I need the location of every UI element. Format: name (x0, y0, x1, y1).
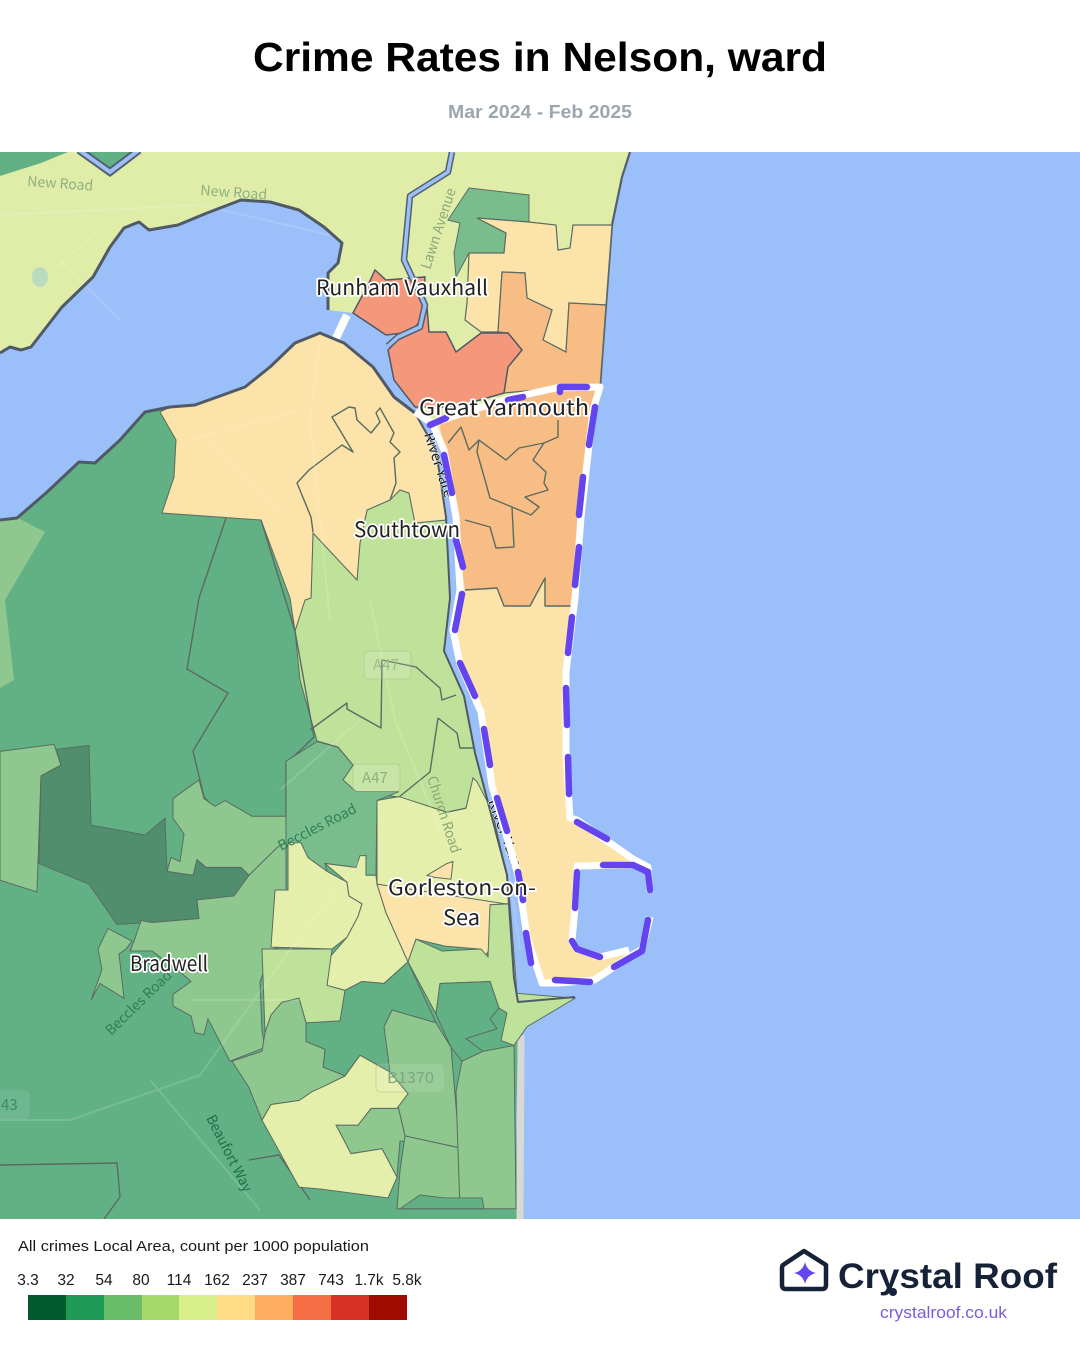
ward: green harbour (436, 982, 499, 1061)
road shield: A143: 43 (1, 1094, 18, 1115)
Southtown ward boundary (297, 407, 400, 532)
beach strip (520, 1035, 521, 1219)
faint street grid (0, 340, 540, 1210)
ward: yellow C (377, 778, 510, 904)
ward: mid north (167, 780, 286, 875)
road shield: B1370 (376, 1064, 444, 1092)
Breydon Water north shore (0, 200, 342, 353)
road label: Beccles Road north: Beccles Road (274, 799, 360, 855)
orange ward north (498, 272, 606, 393)
subtitle: date range: Mar 2024 - Feb 2025 (448, 101, 632, 122)
road label: Beaufort Way: Beaufort Way (202, 1111, 258, 1196)
left light ward (0, 518, 45, 688)
road shield: A47 south: A47 (362, 767, 388, 788)
road label: Beccles Road south: Beccles Road (101, 965, 176, 1040)
road shield: A47 south (353, 764, 400, 792)
panel: choropleth map (0, 150, 1080, 1219)
legend labels: 114 (167, 1272, 192, 1289)
legend labels: 387 (280, 1272, 306, 1289)
legend labels: 743 (318, 1272, 344, 1289)
ward: yellow A (271, 843, 362, 949)
place label: Runham Vauxhall: Runham Vauxhall (316, 272, 488, 302)
title: Crime Rates in Nelson, ward (253, 34, 827, 80)
place label: Gorleston-on-Sea: Sea (443, 902, 480, 932)
logo URL: crystalroof.co.uk (880, 1304, 1008, 1322)
icon: house with star (782, 1251, 826, 1289)
light green ward block east (295, 490, 490, 812)
road shield: A143 (0, 1091, 29, 1119)
road label: New Road west: New Road (27, 171, 94, 196)
road shield: A47 north: A47 (373, 654, 399, 675)
ward: Bradwell central (130, 843, 286, 1061)
ward: yellow south (262, 1055, 408, 1198)
ward: darkest green (39, 745, 249, 924)
bottom green patch (400, 1195, 484, 1209)
ward outline: white with purple dashes (415, 387, 650, 983)
ward: mid east (384, 1010, 459, 1148)
legend labels (17, 1272, 422, 1289)
place label: Southtown: Southtown (354, 514, 460, 544)
ward: beige Gorleston (377, 884, 505, 962)
road label: Lawn Avenue: Lawn Avenue (416, 185, 461, 272)
bridge (336, 315, 347, 338)
logo: Crystal Roof (782, 1251, 1057, 1322)
road shield: A47 north (364, 651, 411, 679)
ward: yellow B (325, 856, 408, 990)
place label: Gorleston-on-Sea: Gorleston-on- (388, 872, 536, 902)
ward: south light green (408, 904, 575, 1045)
river west bank and pier edge (415, 413, 575, 1002)
light green internal boundaries (310, 660, 473, 797)
north-east coast edge (600, 152, 630, 387)
ward: left light (0, 744, 61, 892)
ward: green centre (306, 962, 436, 1076)
legend labels: 80 (132, 1272, 150, 1289)
legend labels: 32 (57, 1272, 75, 1289)
salmon ward: town centre (388, 307, 522, 407)
internal boundaries in the west (0, 518, 314, 1219)
north river channel (388, 152, 452, 346)
road label: New Road east: New Road (200, 180, 268, 205)
Zone group: wards south (zoomed coordinates corrected) (0, 741, 575, 1209)
logo wordmark: Crystal Roof (838, 1257, 1057, 1296)
legend (17, 1238, 422, 1320)
legend labels: 1.7k (354, 1272, 384, 1289)
south land base (0, 410, 522, 1219)
Nelson ward fill (432, 387, 642, 983)
Nelson ward orange part (440, 388, 596, 606)
road label: River Yare north: River Yare (419, 429, 459, 500)
road label: River Yare south: River Yare (483, 796, 527, 871)
beige ward north (465, 218, 612, 352)
ward: mid light green (262, 949, 345, 1033)
place label: Gorleston-on-Sea (388, 872, 536, 932)
legend labels: 5.8k (392, 1272, 422, 1289)
ward: Bradwell small (91, 928, 132, 1000)
ward: Beccles Road (286, 741, 399, 875)
legend labels: 3.3 (17, 1272, 39, 1289)
ward: mid south (232, 998, 345, 1120)
Coast of Southtown (0, 333, 415, 520)
legend labels: 162 (204, 1272, 230, 1289)
place label: Great Yarmouth: Great Yarmouth (419, 392, 589, 422)
green wards north of town (448, 188, 529, 277)
Nelson internal boundary (448, 420, 572, 606)
road shield: B1370: B1370 (387, 1067, 434, 1088)
legend title: All crimes Local Area, count per 1000 population (18, 1238, 369, 1255)
road label: Church Road: Church Road (422, 773, 466, 856)
salmon ward: Vauxhall (353, 270, 425, 335)
north land area (0, 150, 630, 423)
legend colour scale (28, 1295, 407, 1320)
legend labels: 54 (95, 1272, 113, 1289)
legend labels: 237 (242, 1272, 268, 1289)
place label: Bradwell: Bradwell (130, 948, 208, 978)
Southtown beige ward (160, 333, 446, 631)
